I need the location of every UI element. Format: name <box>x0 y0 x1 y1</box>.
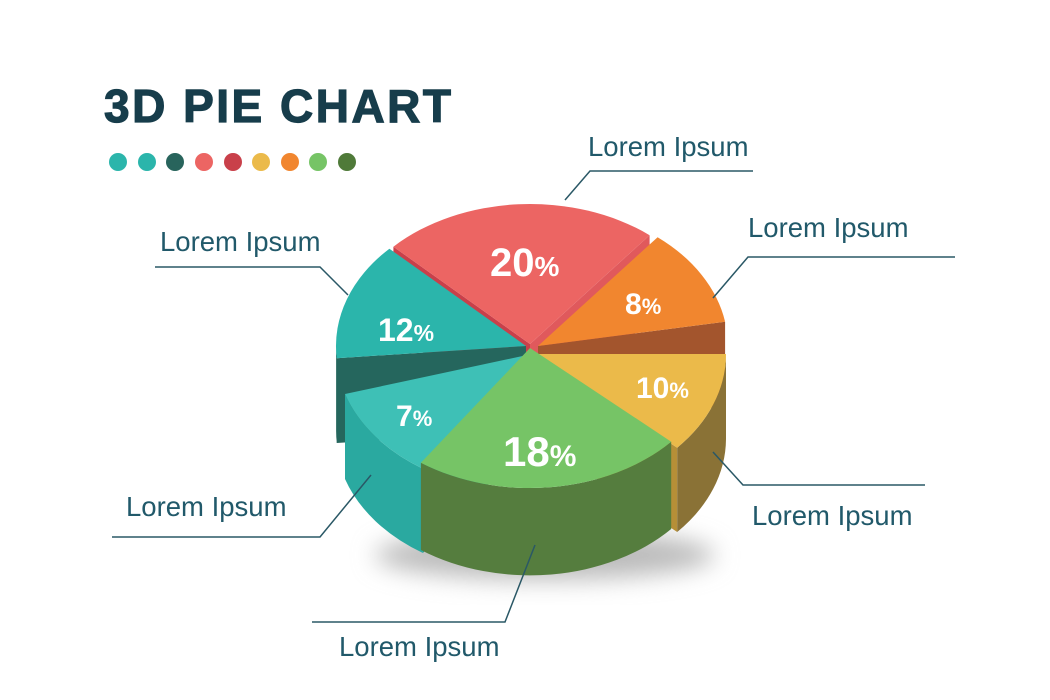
labels and leader lines: Lorem Ipsum <box>126 491 286 522</box>
labels and leader lines: Lorem Ipsum <box>752 500 912 531</box>
percent labels <box>378 241 689 475</box>
labels and leader lines: Lorem Ipsum <box>339 631 499 662</box>
labels and leader lines: Lorem Ipsum <box>748 212 908 243</box>
slice: orange 8% <box>538 237 725 431</box>
pie chart <box>336 204 726 575</box>
color dots <box>109 153 356 171</box>
slice: teal 12% <box>336 249 526 443</box>
percent labels: 18% <box>503 428 576 475</box>
percent labels: 7% <box>396 400 432 433</box>
slice: green 18% <box>421 348 671 575</box>
labels and leader lines <box>112 131 955 662</box>
title: 3D PIE CHART <box>104 80 453 132</box>
percent labels: 12% <box>378 312 434 348</box>
percent labels: 10% <box>636 372 689 405</box>
slice: red 20% <box>393 204 650 429</box>
slice: yellow 10% <box>536 354 726 532</box>
percent labels: 20% <box>490 241 560 285</box>
shadow <box>375 530 715 580</box>
percent labels: 8% <box>625 288 661 321</box>
slice: teal 7% <box>345 354 532 553</box>
labels and leader lines: Lorem Ipsum <box>588 131 748 162</box>
labels and leader lines: Lorem Ipsum <box>160 226 320 257</box>
